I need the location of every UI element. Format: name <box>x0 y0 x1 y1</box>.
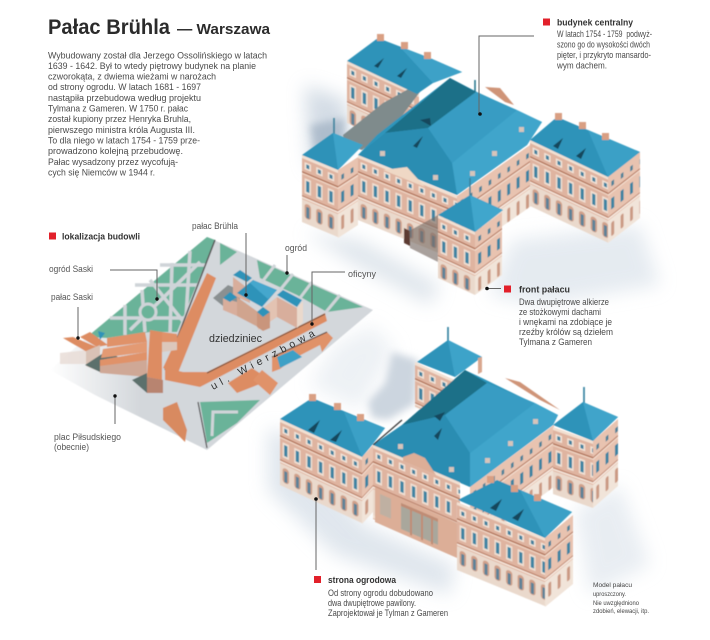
callout: front pałacu: front pałacu <box>519 284 570 294</box>
model note: Nie uwzględniono <box>593 601 640 607</box>
central front wall <box>358 155 458 262</box>
title: — Warszawa <box>177 21 271 38</box>
boundary wall <box>165 240 215 370</box>
intro text block: został kupiony przez Henryka Bruhla, <box>48 114 191 125</box>
intro text block: czworokąta, z dwiema wieżami w narożach <box>48 72 216 82</box>
intro text block: od strony ogrodu. W latach 1681 - 1697 <box>48 82 201 93</box>
central right wall <box>470 425 554 549</box>
map labels and leaders: ul. Wierzbowa <box>209 328 317 393</box>
intro text block: 1639 - 1642. Był to wtedy piętrowy budynek na planie <box>48 61 256 72</box>
title: Pałac Brühla <box>48 16 170 39</box>
callout: strona ogrodowa: strona ogrodowa <box>328 575 397 585</box>
callout: front pałacu: Tylmana z Gameren <box>519 337 592 348</box>
lower outbuildings <box>228 332 333 395</box>
model note: Model pałacu <box>593 583 632 589</box>
intro text block: cych się Niemców w 1944 r. <box>48 168 155 178</box>
saxon palace blocks <box>60 330 177 393</box>
back tower <box>415 327 482 425</box>
callout: budynek centralny: pięter, i przykryto mansardo- <box>557 50 651 61</box>
map labels and leaders: (obecnie) <box>54 442 89 452</box>
map labels and leaders: oficyny <box>348 269 376 279</box>
front tower <box>438 178 503 295</box>
map labels and leaders: pałac Saski <box>51 292 93 302</box>
intro text block: To dla niego w latach 1754 - 1759 prze- <box>48 136 200 146</box>
intro text block: nastąpiła przebudowa według projektu <box>48 93 201 104</box>
callout: budynek centralny: wym dachem. <box>556 60 607 72</box>
main roof <box>373 370 558 487</box>
callout: strona ogrodowa: Zaprojektował je Tylman z Gameren <box>328 608 448 619</box>
map: location of the building <box>50 237 373 450</box>
intro text block: Wybudowany został dla Jerzego Ossolińskiego w latach <box>48 50 267 62</box>
title <box>48 16 271 39</box>
left tower <box>302 118 363 238</box>
callout: front pałacu: Dwa dwupiętrowe alkierze <box>519 297 609 308</box>
illustration: palace, garden side <box>280 327 618 607</box>
callout: strona ogrodowa: Od strony ogrodu dobudowano <box>328 588 433 599</box>
callout: budynek centralny <box>478 18 652 116</box>
right wing <box>530 113 640 243</box>
saxon garden <box>87 237 215 338</box>
model note: zdobień, elewacji, itp. <box>593 609 649 615</box>
intro text block <box>48 50 267 178</box>
callout: strona ogrodowa: dwa dwupiętrowe pawilony. <box>328 598 416 609</box>
back wing <box>343 34 462 156</box>
central right wall <box>457 144 531 258</box>
front right wing <box>457 476 573 607</box>
model note <box>593 583 649 615</box>
map ground <box>50 237 373 450</box>
map labels and leaders: ogród Saski <box>49 264 93 274</box>
pink rear wing peeking behind roof <box>485 87 514 105</box>
illustration: palace, front view <box>302 34 640 295</box>
central garden facade <box>373 445 460 558</box>
callout: front pałacu: rzeźby królów są dziełem <box>519 327 613 338</box>
intro text block: prowadzono kolejną przebudowę. <box>48 146 183 157</box>
map labels and leaders: ogród <box>285 243 307 253</box>
map labels and leaders <box>49 221 376 452</box>
callout: front pałacu: i wnękami na zdobiące je <box>519 317 612 328</box>
left outbuilding <box>163 273 216 373</box>
callout: front pałacu <box>485 284 613 348</box>
map heading: lokalizacja budowli <box>62 232 140 242</box>
main roof <box>358 78 542 195</box>
palace garden <box>220 243 363 312</box>
callout: budynek centralny: budynek centralny <box>557 18 633 28</box>
shadows around buildings <box>268 85 660 595</box>
callout: strona ogrodowa <box>314 497 448 619</box>
intro text block: Tylmana z Gameren. W 1750 r. pałac <box>48 104 188 114</box>
callout: budynek centralny: szono go do wysokości dwóch <box>557 40 650 50</box>
intro text block: Pałac wysadzony przez wycofują- <box>48 157 178 168</box>
south garden <box>198 400 260 448</box>
callout: front pałacu: ze stożkowymi dachami <box>519 307 601 318</box>
map labels and leaders: dziedziniec <box>209 333 262 345</box>
miniature palace <box>213 270 303 331</box>
callout: budynek centralny: W latach 1754 - 1759 podwyż- <box>557 29 652 40</box>
map labels and leaders: pałac Brühla <box>192 221 238 231</box>
south building <box>163 402 187 442</box>
intro text block: pierwszego ministra króla Augusta III. <box>48 125 195 136</box>
left wing <box>280 394 385 524</box>
wierzbowa outbuilding <box>165 313 327 387</box>
model note: uproszczony. <box>593 592 626 598</box>
map labels and leaders: plac Piłsudskiego <box>54 432 121 442</box>
right tower <box>553 387 618 508</box>
